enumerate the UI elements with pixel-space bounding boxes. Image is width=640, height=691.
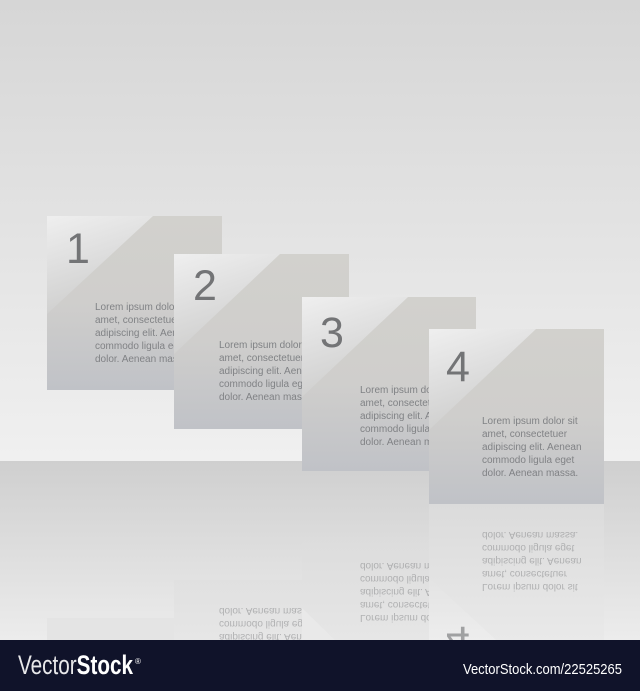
floor [0, 461, 640, 640]
text block 1: dolor. Aenean massa. [95, 354, 191, 365]
reflection: card 4: adipiscing elit. Aenean [482, 555, 582, 566]
panel: card 4 [429, 329, 604, 504]
text block 1 [95, 302, 195, 365]
number 2: 2 [193, 262, 217, 310]
footer bar [0, 640, 640, 691]
text block 1: amet, consectetuer [95, 315, 181, 326]
reflection: card 3: dolor. Aenean massa. [360, 560, 456, 571]
footer logo: VectorStock [18, 650, 134, 680]
text block 4: Lorem ipsum dolor sit [482, 416, 578, 427]
text block 3: Lorem ipsum dolor sit [360, 385, 456, 396]
panel: card 3 [302, 297, 476, 471]
reflection: card 3: Lorem ipsum dolor sit [360, 612, 456, 623]
number 4: 4 [446, 343, 470, 391]
reflection: card 4: Lorem ipsum dolor sit [482, 581, 578, 592]
text block 3: dolor. Aenean massa. [360, 437, 456, 448]
text block 2: dolor. Aenean massa. [219, 392, 315, 403]
reflection: card 4: amet, consectetuer [482, 568, 568, 579]
reflection: card 3: amet, consectetuer [360, 599, 446, 610]
number 1: 1 [66, 225, 90, 273]
reflection: card 3: commodo ligula eget [360, 573, 452, 584]
reflection: card 3 [302, 537, 476, 640]
text block 3: commodo ligula eget [360, 424, 452, 435]
text block 3: adipiscing elit. Aenean [360, 411, 460, 422]
text block 2: Lorem ipsum dolor sit [219, 340, 315, 351]
text block 2: amet, consectetuer [219, 353, 305, 364]
text block 1: adipiscing elit. Aenean [95, 328, 195, 339]
reflection: card 2 [174, 580, 349, 642]
number 3: 3 [320, 309, 344, 357]
text block 1: commodo ligula eget [95, 341, 187, 352]
text block 4: dolor. Aenean massa. [482, 468, 578, 479]
reflection: card 2: dolor. Aenean massa. [219, 605, 315, 616]
reflection: card 4: commodo ligula eget [482, 542, 574, 553]
reflection: card 3: adipiscing elit. Aenean [360, 586, 460, 597]
footer url: VectorStock.com/22525265 [463, 662, 622, 678]
text block 4 [482, 416, 582, 479]
text block 2: commodo ligula eget [219, 379, 311, 390]
registered mark: ® [135, 657, 141, 666]
text block 3: amet, consectetuer [360, 398, 446, 409]
background wall [0, 0, 640, 461]
reflection: card 4: dolor. Aenean massa. [482, 529, 578, 540]
reflection: card 2: commodo ligula eget [219, 618, 311, 629]
text block 4: adipiscing elit. Aenean [482, 442, 582, 453]
panel: card 2 [174, 254, 349, 429]
reflection: card 2: adipiscing elit. Aenean [219, 631, 319, 642]
reflection: card 1 [47, 618, 174, 640]
text block 1: Lorem ipsum dolor sit [95, 302, 191, 313]
text block 3 [360, 385, 460, 448]
reflection: card 4: 4 [446, 617, 470, 665]
text block 4: commodo ligula eget [482, 455, 574, 466]
text block 2: adipiscing elit. Aenean [219, 366, 319, 377]
panel: card 1 [47, 216, 222, 390]
reflection: card 4 [429, 504, 604, 665]
text block 4: amet, consectetuer [482, 429, 568, 440]
text block 2 [219, 340, 319, 403]
